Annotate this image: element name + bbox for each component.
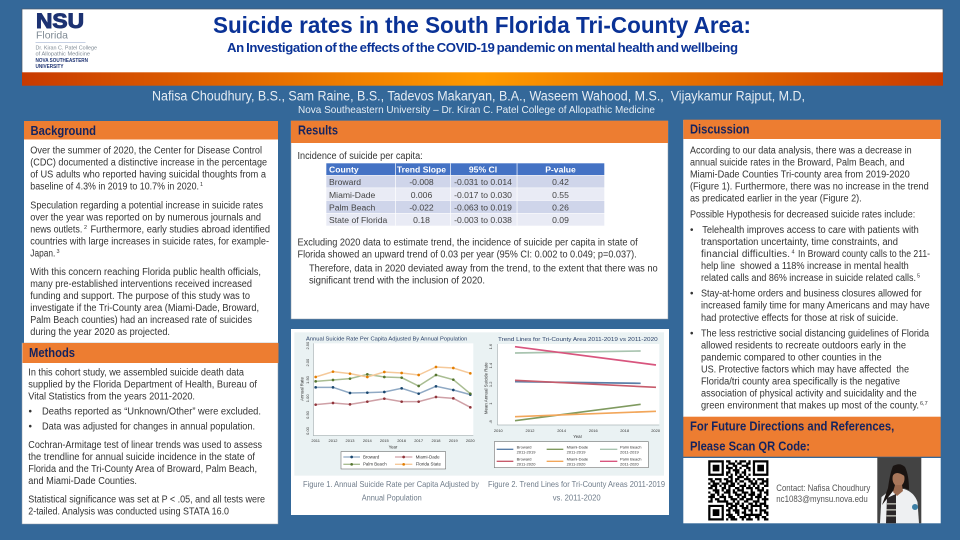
series: Florida State [314,366,472,378]
chart: annual suicide rate: 2.50 [305,341,310,350]
text: results summary: Excluding 2020 data to estimate trend, the incidence of suicide per capita in state of [298,238,638,249]
text: results summary [298,238,658,287]
icon: portrait photo [877,457,921,523]
chart: trend lines: 2020 [651,428,661,433]
text: analysis summary: (Figure 1). Furthermore, there was no increase in the trend [690,182,929,193]
text: contact [776,482,871,504]
text: study description: Vital Statistics from the years 2011-2020. [28,392,195,403]
text: statistical test [28,440,262,487]
logo: NSU Florida: NSU [36,10,84,33]
list item: telehealth: transportation uncertainty, time constraints, and [701,237,898,248]
chart: annual suicide rate: Year [389,444,398,449]
text: paragraph 1: baseline of 4.3% in 2019 to 10.7% in 2020. [30,182,199,192]
table: trend slopes: Palm Beach [329,202,376,212]
legend: Broward [517,444,532,449]
legend [494,442,648,468]
table: trend slopes: -0.008 [409,177,434,187]
legend: Florida State [416,462,442,467]
chart: annual suicide rate: 0.50 [305,410,310,419]
text: analysis summary: According to our data analysis, there was a decrease in [690,146,912,157]
text: contact: Contact: Nafisa Choudhury [776,482,871,493]
list item: social distancing: 6,7 [920,401,928,407]
list item: stay-at-home: had protective effects for those at risk of suicide. [701,313,898,324]
chart: annual suicide rate: 0.00 [305,426,310,435]
list: exclusions: Deaths reported as “Unknown/Other” were excluded. [42,406,261,418]
caption: figure 2: vs. 2011-2020 [553,493,601,503]
text: significance: 2-tailed. Analysis was conducted using STATA 16.0 [28,507,229,518]
legend: 2011-2020 [567,461,586,466]
list item: telehealth: 4 [792,250,795,256]
text: paragraph 3 [30,267,261,338]
legend: 2011-2019 [620,449,640,454]
text: analysis summary: Miami-Dade Counties Tri-county area from 2019-2020 [690,170,910,181]
text: future directions heading: For Future Directions and References, [690,420,894,434]
text: results summary: Therefore, data in 2020 deviated away from the trend, to the extent that there was no [309,264,658,275]
heading: discussion: Discussion [690,123,750,137]
heading: background: Background [30,124,96,138]
panel: contact [683,457,941,523]
chart: trend lines: .8 [488,420,493,424]
text: analysis summary [690,146,929,205]
panel: future directions callout [683,417,941,457]
table: trend slopes: Broward [329,177,361,187]
text: statistical test: Florida and the Tri-County Area of Broward, Palm Beach, [28,464,257,475]
panel: figures [291,329,669,515]
table: trend slopes: P-value [545,164,576,174]
chart: annual suicide rate: 2014 [363,438,373,443]
text: paragraph 2: 2 [84,225,87,231]
table: trend slopes [326,163,604,226]
text: paragraph 1: 1 [200,182,203,188]
text: future directions heading: Please Scan QR Code: [690,440,810,454]
chart: annual suicide rate: 2012 [329,438,338,443]
list item: social distancing: Florida/tri county area specifically is the negative [701,377,900,388]
legend: Miami-Dade [416,454,440,459]
text: paragraph 1: Over the summer of 2020, the Center for Disease Control [30,146,262,156]
chart: annual suicide rate: Annual Suicide Rate Per Capita Adjusted By Annual Population [306,336,467,342]
panel: discussion [683,120,941,417]
list: exclusions: Data was adjusted for changes in annual population. [42,421,255,432]
table: trend slopes: State of Florida [329,215,387,225]
text: paragraph 2: Japan. [30,249,55,260]
table: trend slopes: -0.063 to 0.019 [454,202,512,212]
legend: Broward [517,456,532,461]
legend: Palm Beach [363,462,387,467]
table: trend slopes: County [329,164,359,174]
legend: Broward [363,454,380,459]
list item: stay-at-home: increased family time for many Americans and may have [701,301,930,312]
text: results summary: significant trend with the inclusion of 2020. [309,276,485,287]
text: paragraph 1 [30,146,267,192]
table: trend slopes: 0.55 [552,190,569,200]
legend: Miami-Dade [567,444,589,449]
legend: 2011-2019 [517,449,536,454]
table: trend slopes: 95% CI [469,164,497,174]
text: paragraph 3: With this concern reaching Florida public health officials, [30,267,261,278]
chart: trend lines: 2014 [557,428,567,433]
text: paragraph 1: (CDC) documented a distinctive increase in the percentage [30,158,267,168]
list item: social distancing: allowed residents to recreate outdoors early in the [701,341,906,352]
text: study description: supplied by the Florida Department of Health, Bureau of [28,380,257,391]
text: future directions heading [690,420,894,454]
text: study description: In this cohort study, we assembled suicide death data [28,368,244,379]
table: trend slopes: 0.09 [552,215,569,225]
series: Broward [314,385,472,396]
chart: annual suicide rate: 2020 [466,438,476,443]
chart: trend lines [480,332,664,476]
chart: annual suicide rate [294,332,480,476]
caption: figure 2 [488,479,665,503]
chart: annual suicide rate: 2016 [397,438,407,443]
table: trend slopes: Miami-Dade [329,190,376,200]
list item: telehealth: In Broward county calls to the 211- [798,249,930,260]
chart: trend lines: 2012 [526,428,535,433]
list item: telehealth [690,225,930,284]
text: study description [28,368,257,403]
chart: trend lines: 2016 [589,428,599,433]
list item: social distancing: pandemic compared to other counties in the [701,353,882,364]
table: trend slopes: 0.006 [411,190,432,200]
text: significance [28,495,265,518]
legend: 2011-2019 [567,449,586,454]
chart: trend lines: Year [573,434,583,439]
logo: NSU Florida: of Allopathic Medicine [36,52,90,58]
table: trend slopes: -0.003 to 0.038 [454,215,512,225]
chart: annual suicide rate: 2013 [346,438,355,443]
text: statistical test: the trendline for annual suicide incidence in the state of [28,452,255,463]
text: paragraph 3: Palm Beach counties) had an increased rate of suicides [30,315,252,326]
chart: trend lines: 1 [488,402,493,405]
chart: annual suicide rate: 2018 [432,438,441,443]
chart: trend lines: 2010 [494,428,504,433]
legend: Miami-Dade [567,456,589,461]
chart: trend lines: 2018 [620,428,630,433]
header banner [22,9,943,86]
chart: annual suicide rate: 2017 [414,438,424,443]
legend: Palm Beach [620,456,641,461]
text: statistical test: and Miami-Dade Counties. [28,476,137,487]
chart: annual suicide rate: 2015 [380,438,390,443]
panel: background [24,121,278,343]
table: trend slopes: 0.18 [413,215,430,225]
list item: telehealth: help line showed a 118% increase in mental health [701,261,909,272]
text: contact: nc1083@mynsu.nova.edu [776,493,868,504]
list item: social distancing: green environment that makes up most of the county. [701,401,919,412]
series: Palm Beach [314,373,472,395]
legend [341,452,446,469]
list item: social distancing: association of physical activity and suicidality and the [701,389,917,400]
list: exclusions: • [28,421,32,432]
chart: trend lines: 1.4 [488,362,493,368]
text: paragraph 3: many pre-established interventions received increased [30,279,252,290]
text: table intro: Incidence of suicide per capita: [298,151,423,162]
text: analysis summary: annual suicide rates in the Broward, Palm Beach, and [690,158,905,169]
caption: figure 1: Annual Population [362,493,422,503]
text: paragraph 2: countries with large increases in suicide rates, for example- [30,237,269,248]
list item: telehealth: • [690,225,694,236]
heading: methods: Methods [29,346,75,360]
table: trend slopes: Trend Slope [397,164,446,174]
logo: NSU Florida: UNIVERSITY [36,64,64,70]
list item: telehealth: 5 [917,274,920,280]
table: trend slopes: -0.022 [409,202,434,212]
text: hypothesis intro: Possible Hypothesis for decreased suicide rates include: [690,209,915,220]
chart: trend lines: 1.2 [488,381,493,387]
legend: Palm Beach [620,444,641,449]
list item: stay-at-home: Stay-at-home orders and business closures allowed for [701,289,922,300]
panel: results [291,121,668,319]
list item: social distancing [690,329,929,412]
table: trend slopes: 0.26 [552,202,569,212]
caption: figure 2: Figure 2. Trend Lines for Tri-County Areas 2011-2019 [488,479,665,489]
list: exclusions [28,406,261,432]
text: paragraph 2: Speculation regarding a potential increase in suicide rates [30,201,263,212]
list: exclusions: • [28,406,32,418]
logo: NSU Florida: NOVA SOUTHEASTERN [36,58,88,64]
text: paragraph 2: Furthermore, early studies abroad identified [90,225,270,236]
authors: Nafisa Choudhury, B.S., Sam Raine, B.S., Tadevos Makaryan, B.A., Waseem Wahood, M.S., Vijaykamur Rajput, M.D, [152,88,805,104]
chart: annual suicide rate: 1.00 [305,394,310,402]
text: results summary: Florida showed an upward trend of 0.03 per year (95% CI: 0.002 to 0.049; p=0.037). [298,250,637,261]
table: trend slopes: -0.031 to 0.014 [454,177,512,187]
list item: stay-at-home [690,289,930,324]
trend lines [515,347,656,421]
text: paragraph 3: investigate if the Tri-County area (Miami-Dade, Broward, [30,303,259,314]
legend: 2011-2020 [620,461,640,466]
list item: telehealth: Telehealth improves access to care with patients with [702,225,919,236]
logo: NSU Florida: Dr. Kiran C. Patel College [36,46,97,52]
text: significance: Statistical significance was set at P < .05, and all tests were [28,495,265,506]
chart: annual suicide rate: 2.00 [305,358,310,367]
logo: NSU Florida: Florida [36,30,68,42]
text: paragraph 2: over the year was reported on by numerous journals and [30,213,261,224]
caption: figure 1: Figure 1. Annual Suicide Rate per Capita Adjusted by [303,479,480,489]
list item: telehealth: financial difficulties. [701,249,790,260]
list item: stay-at-home: • [690,289,694,300]
text: paragraph 2 [30,201,270,260]
list item: social distancing: • [690,329,694,340]
text: paragraph 3: during the year 2020 as projected. [30,327,170,338]
text: paragraph 3: funding and support. The purpose of this study was to [30,291,250,302]
text: statistical test: Cochran-Armitage test of linear trends was used to assess [28,440,262,451]
list item: telehealth: related calls and 86% increase in suicide related calls. [701,273,916,284]
chart: annual suicide rate: Annual Rate [299,376,304,401]
icon: QR code [706,458,771,523]
text: paragraph 1: of US adults who reported having suicidal thoughts from a [30,170,266,180]
list item: social distancing: US. Protective factors which may have affected the [701,365,909,376]
affiliation: Nova Southeastern University – Dr. Kiran C. Patel College of Allopathic Medicine [298,104,655,116]
chart: annual suicide rate: 2011 [311,438,321,443]
caption: figure 1 [303,479,480,503]
logo: NSU Florida [36,10,97,70]
chart: trend lines: Trend Lines for Tri-County Area 2011-2019 vs 2011-2020 [498,337,658,343]
text: paragraph 2: news outlets. [30,225,82,236]
chart: trend lines: 1.6 [488,343,493,349]
text: analysis summary: as predicated earlier in the year (Figure 2). [690,194,862,205]
series: Miami-Dade [314,396,472,409]
title: Suicide rates in the South Florida Tri-County Area: [213,12,751,38]
list item: social distancing: The less restrictive social distancing guidelines of Florida [701,329,929,340]
chart: annual suicide rate: 1.50 [305,375,310,384]
legend: 2011-2020 [517,461,536,466]
text: paragraph 2: 3 [56,249,60,255]
subtitle: An Investigation of the effects of the COVID-19 pandemic on mental health and wellbeing [227,40,738,55]
table: trend slopes: 0.42 [552,177,569,187]
table: trend slopes: -0.017 to 0.030 [454,190,512,200]
chart: annual suicide rate: 2019 [449,438,459,443]
panel: methods [22,343,278,524]
heading: results: Results [298,124,338,138]
chart: trend lines: Mean Annual Suicide Rate [483,362,488,414]
